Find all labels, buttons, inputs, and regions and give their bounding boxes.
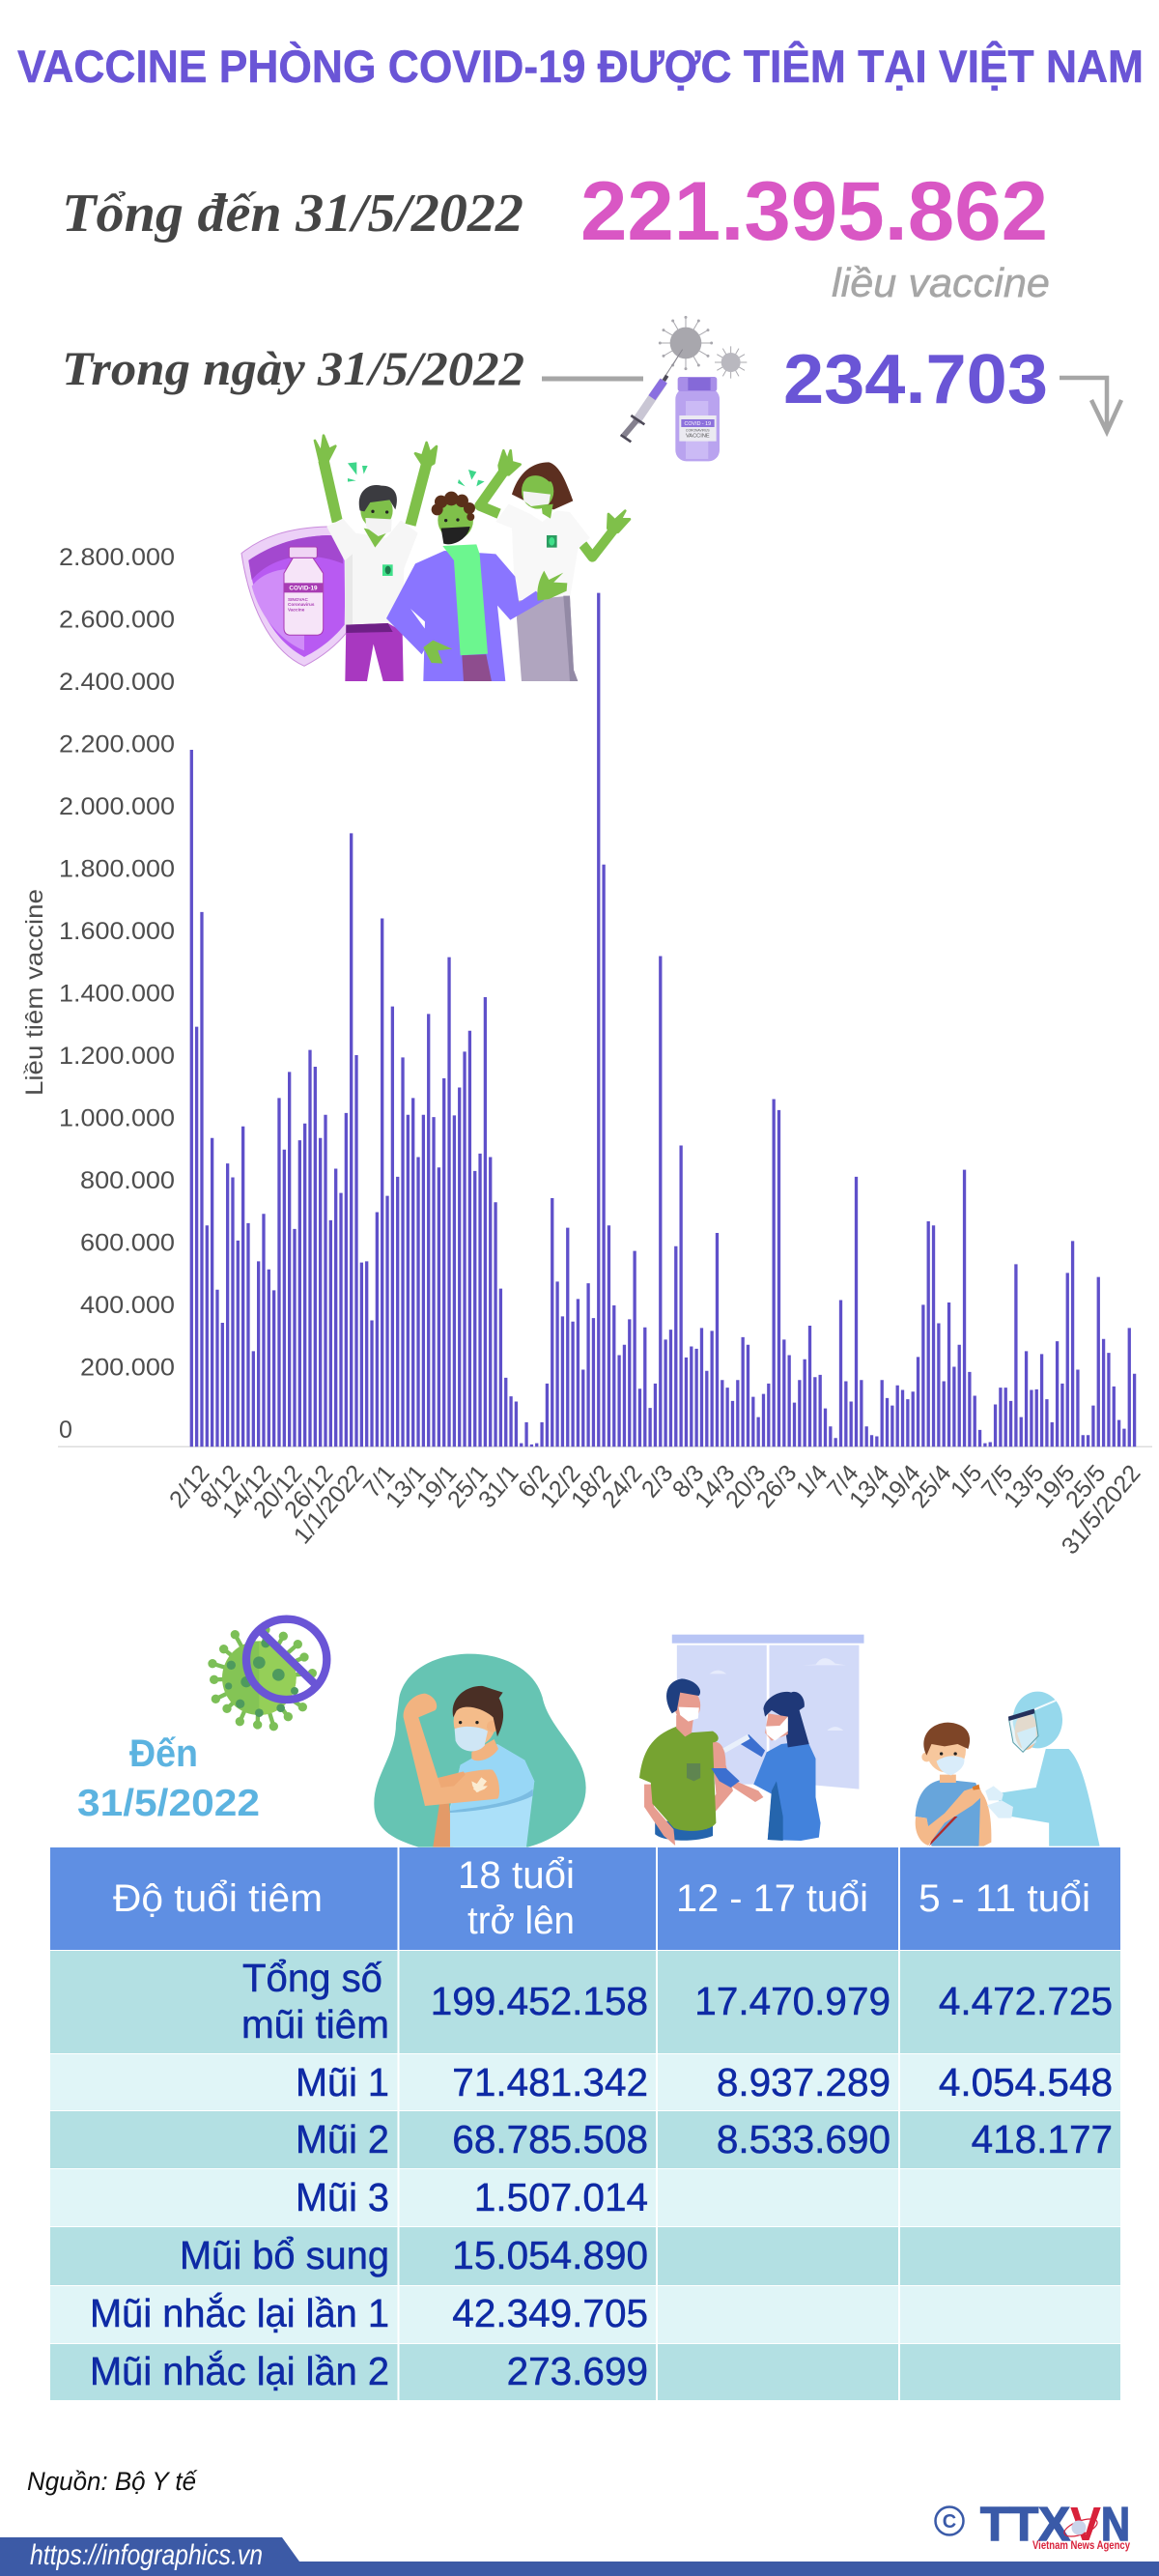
y axis labels xyxy=(59,544,175,1444)
x axis date labels: 7/5 xyxy=(976,1460,1019,1503)
x axis date labels: 1/5 xyxy=(946,1460,988,1503)
x axis date labels: 19/5 xyxy=(1030,1460,1081,1513)
row: booster 1 xyxy=(50,2286,1120,2343)
illustration: shield and cheering people xyxy=(241,436,630,681)
y axis labels: 1.800.000 xyxy=(59,856,175,883)
x axis date labels: 1/4 xyxy=(791,1460,834,1503)
y axis labels: 600.000 xyxy=(80,1229,175,1256)
x axis date labels: 18/2 xyxy=(566,1460,617,1513)
row: total doses: Tổng số xyxy=(242,1956,382,2000)
x axis date labels: 31/5/2022 xyxy=(1057,1460,1146,1560)
x axis date labels: 13/4 xyxy=(844,1460,895,1513)
x axis date labels: 13/1 xyxy=(381,1460,432,1513)
row: additional dose: Mũi bổ sung xyxy=(180,2233,389,2277)
shield with vial: COVID-19 xyxy=(289,586,318,592)
x axis date labels: 6/2 xyxy=(513,1460,555,1503)
connector line xyxy=(542,377,643,381)
row: dose 3 xyxy=(50,2169,1120,2226)
y axis labels: 2.800.000 xyxy=(59,544,175,571)
x axis date labels: 14/12 xyxy=(217,1460,277,1524)
label: as of date: Đến xyxy=(129,1732,198,1775)
x axis date labels: 25/4 xyxy=(906,1460,957,1513)
x axis date labels: 2/12 xyxy=(164,1460,215,1513)
table header: 18 tuổi xyxy=(458,1854,575,1897)
row: booster 1: Mũi nhắc lại lần 1 xyxy=(90,2291,389,2335)
logo: TTXVN xyxy=(935,2499,1130,2552)
table header xyxy=(50,1847,1120,1950)
y axis labels: 2.400.000 xyxy=(59,669,175,696)
x axis date labels: 25/1 xyxy=(442,1460,494,1513)
unit label: liều vaccine xyxy=(832,260,1050,305)
row: total doses xyxy=(50,1951,1120,2053)
woman doctor xyxy=(458,450,630,681)
x axis date labels: 8/3 xyxy=(667,1460,710,1503)
source note: Nguồn: Bộ Y tế xyxy=(27,2467,198,2496)
row: dose 2: 68.785.508 xyxy=(452,2117,648,2161)
y axis labels: 1.000.000 xyxy=(59,1105,175,1132)
x axis date labels: 26/12 xyxy=(279,1460,339,1524)
illustration: nurse vaccinating a man by a window xyxy=(639,1635,864,1846)
shield with vial: Vaccine xyxy=(288,607,305,612)
y axis labels: 400.000 xyxy=(80,1292,175,1319)
x axis date labels: 25/5 xyxy=(1060,1460,1112,1513)
logo: TTXVN: Vietnam News Agency xyxy=(1032,2540,1130,2552)
row: dose 1: Mũi 1 xyxy=(296,2060,389,2104)
table header: Độ tuổi tiêm xyxy=(113,1877,323,1920)
icon: syringe, vial and viruses: COVID - 19 xyxy=(685,421,711,427)
y axis labels: 0 xyxy=(59,1417,72,1444)
row: dose 2: 8.533.690 xyxy=(717,2117,890,2161)
illustration: health worker vaccinating a child xyxy=(916,1692,1100,1846)
x axis date labels: 31/1 xyxy=(473,1460,524,1513)
row: dose 2 xyxy=(50,2111,1120,2168)
row: additional dose: 15.054.890 xyxy=(452,2233,648,2277)
y axis labels: 200.000 xyxy=(80,1355,175,1382)
daily doses number: 234.703 xyxy=(783,341,1048,418)
y axis labels: 1.400.000 xyxy=(59,980,175,1007)
row: dose 2: Mũi 2 xyxy=(296,2117,389,2161)
table header: 12 - 17 tuổi xyxy=(676,1877,868,1920)
row: booster 2: 273.699 xyxy=(507,2349,648,2393)
x axis date labels: 24/2 xyxy=(597,1460,648,1513)
logo: TTXVN: TTX xyxy=(980,2499,1070,2551)
row: total doses: 17.470.979 xyxy=(694,1979,890,2023)
heading: within the day: Trong ngày 31/5/2022 xyxy=(62,341,524,395)
man in purple coat xyxy=(386,492,567,681)
row: booster 2: Mũi nhắc lại lần 2 xyxy=(90,2349,389,2393)
x axis date labels xyxy=(164,1460,1146,1560)
x axis date labels: 2/3 xyxy=(636,1460,679,1503)
icon: syringe, vial and viruses: CORONAVIRUS xyxy=(686,429,710,433)
x axis date labels: 19/4 xyxy=(875,1460,926,1513)
chart: daily doses xyxy=(21,544,1152,1560)
y axis labels: 1.200.000 xyxy=(59,1043,175,1070)
icon: syringe, vial and viruses: VACCINE xyxy=(686,434,710,440)
x axis date labels: 26/3 xyxy=(751,1460,803,1513)
x axis date labels: 7/1 xyxy=(358,1460,401,1503)
row: dose 2: 418.177 xyxy=(972,2117,1113,2161)
row: booster 2 xyxy=(50,2344,1120,2400)
table header: trở lên xyxy=(467,1900,575,1942)
y axis title: Liều tiêm vaccine xyxy=(21,889,48,1096)
row: total doses: 199.452.158 xyxy=(431,1979,648,2023)
row: booster 1: 42.349.705 xyxy=(452,2291,648,2335)
row: dose 1: 8.937.289 xyxy=(717,2060,890,2104)
y axis labels: 2.200.000 xyxy=(59,730,175,758)
x axis date labels: 20/12 xyxy=(248,1460,308,1524)
row: dose 3: Mũi 3 xyxy=(296,2175,389,2219)
icon: crossed-out virus xyxy=(212,1619,326,1727)
x axis date labels: 19/1 xyxy=(411,1460,463,1513)
row: dose 1: 4.054.548 xyxy=(939,2060,1113,2104)
y axis labels: 2.600.000 xyxy=(59,607,175,634)
row: total doses: mũi tiêm xyxy=(241,2002,389,2046)
x axis date labels: 13/5 xyxy=(999,1460,1050,1513)
x axis date labels: 12/2 xyxy=(535,1460,586,1513)
row: dose 1 xyxy=(50,2054,1120,2110)
row: total doses: 4.472.725 xyxy=(939,1979,1113,2023)
illustration: man with bandaged arm xyxy=(374,1654,586,1847)
logo: TTXVN: N xyxy=(1101,2499,1130,2551)
table header: 5 - 11 tuổi xyxy=(919,1877,1090,1920)
x axis date labels: 1/1/2022 xyxy=(289,1460,370,1549)
heading: total to date: Tổng đến 31/5/2022 xyxy=(62,184,523,243)
x axis date labels: 7/4 xyxy=(822,1460,864,1503)
y axis labels: 800.000 xyxy=(80,1167,175,1194)
table: doses by age group xyxy=(50,1847,1120,2400)
row: dose 1: 71.481.342 xyxy=(452,2060,648,2104)
label: as of date xyxy=(77,1732,260,1824)
bars xyxy=(191,593,1135,1446)
row: additional dose xyxy=(50,2227,1120,2285)
row: dose 3: 1.507.014 xyxy=(474,2175,648,2219)
icon: syringe, vial and viruses xyxy=(621,317,747,461)
shield with vial: SINOVAC xyxy=(288,597,309,602)
logo: TTXVN: V xyxy=(1070,2499,1101,2551)
footer band with URL xyxy=(0,2537,1159,2576)
man with raised arms xyxy=(315,436,437,681)
label: as of date: 31/5/2022 xyxy=(77,1783,260,1824)
x axis date labels: 8/12 xyxy=(195,1460,246,1513)
total doses number: 221.395.862 xyxy=(580,165,1048,258)
icon: down arrow xyxy=(1060,378,1121,432)
shield with vial xyxy=(241,527,350,666)
x axis date labels: 14/3 xyxy=(690,1460,741,1513)
y axis labels: 1.600.000 xyxy=(59,918,175,945)
shield with vial: Coronavirus xyxy=(288,602,315,607)
x axis date labels: 20/3 xyxy=(721,1460,772,1513)
footer band with URL: https://infographics.vn xyxy=(30,2539,263,2571)
logo: TTXVN: C xyxy=(943,2511,956,2533)
y axis labels: 2.000.000 xyxy=(59,793,175,820)
